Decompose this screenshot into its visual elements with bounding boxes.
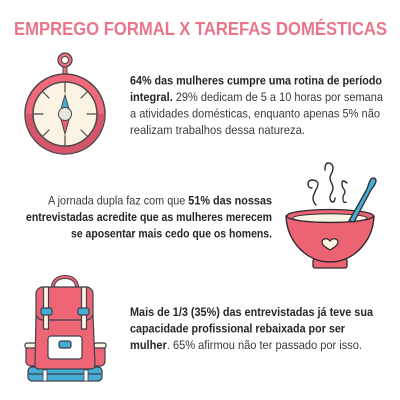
text block: double shift: se aposentar mais cedo que os homens. — [71, 226, 272, 240]
text block: full-time routine — [130, 74, 383, 137]
icon: backpack — [25, 277, 106, 381]
icon: bowl with spoon and steam — [286, 163, 376, 268]
text block: double shift: A jornada dupla faz com que 51% das nossas — [48, 194, 272, 208]
text block: professional capacity: mulher. 65% afirmou não ter passado por isso. — [130, 338, 362, 352]
icon: compass — [25, 53, 105, 154]
text block: double shift — [26, 194, 272, 240]
text block: full-time routine: realizam trabalhos dessa natureza. — [130, 123, 305, 137]
text block: professional capacity: Mais de 1/3 (35%) das entrevistadas já teve sua — [130, 305, 373, 319]
text block: double shift: entrevistadas acredite que as mulheres merecem — [26, 210, 272, 224]
text block: professional capacity — [130, 305, 373, 352]
text block: professional capacity: capacidade profissional rebaixada por ser — [130, 322, 345, 336]
